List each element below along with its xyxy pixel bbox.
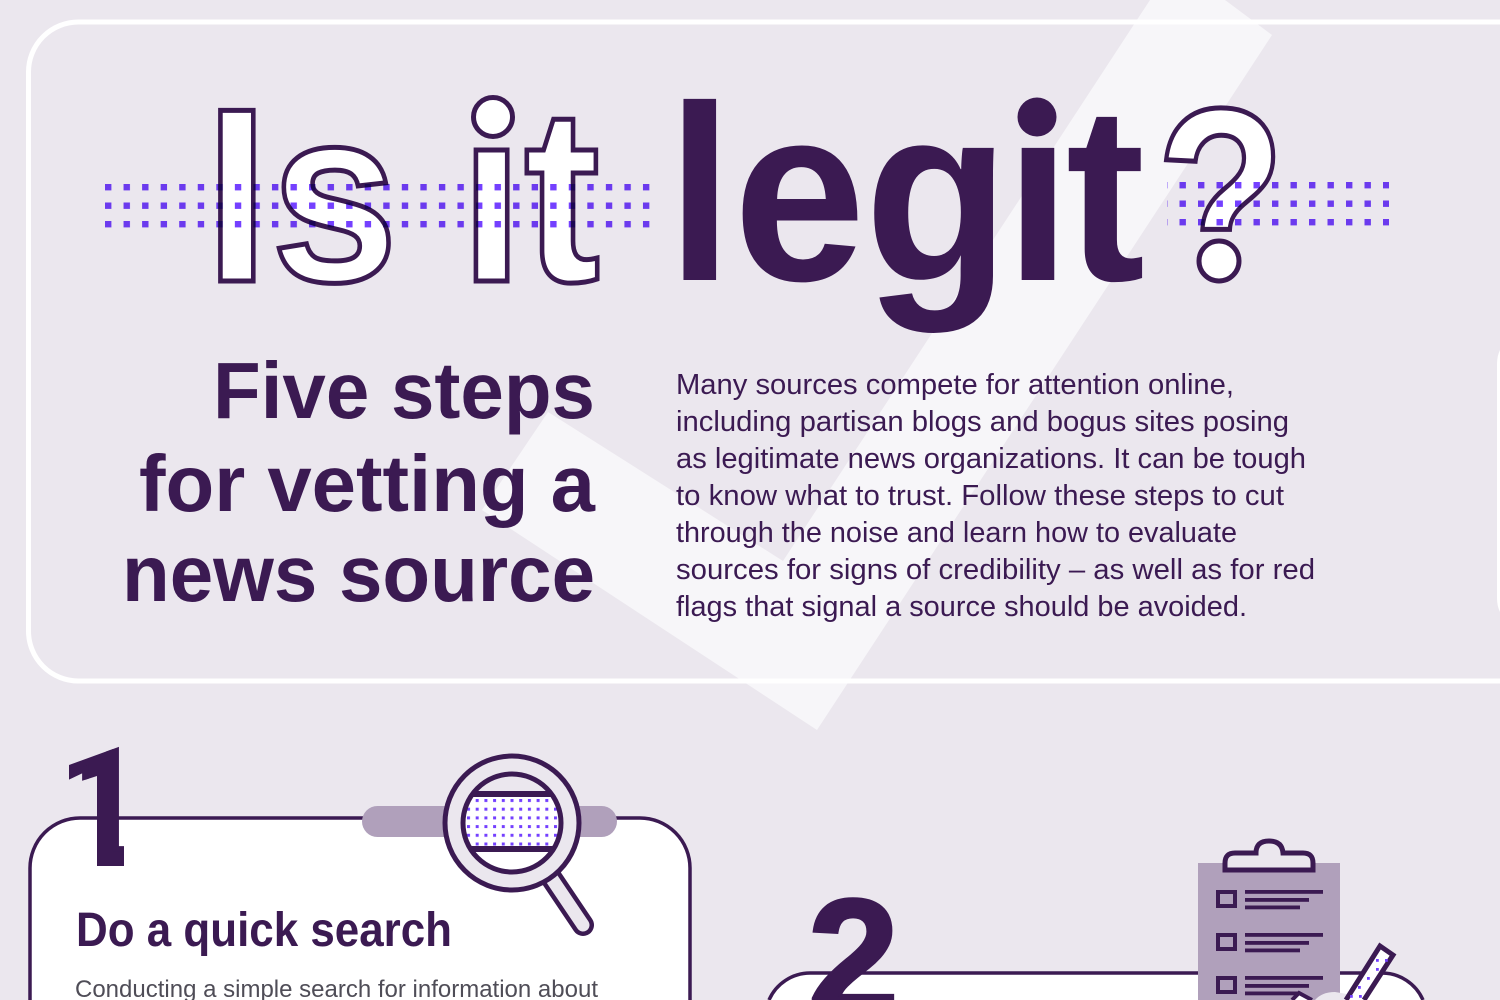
dot of solid i [1018,98,1056,136]
subtitle: Five steps [213,346,595,435]
icon: pencil [1346,946,1393,1000]
dot band left [105,184,650,228]
intro paragraph: through the noise and learn how to evaluate [676,517,1237,549]
subtitle: for vetting a [139,439,596,528]
intro paragraph: including partisan blogs and bogus sites posing [676,406,1289,438]
intro paragraph: Many sources compete for attention online, [676,369,1234,401]
title outline question mark: ? [1157,57,1285,334]
dot of question mark [1199,241,1239,281]
subtitle: news source [122,529,595,618]
subtitle [122,346,596,618]
step 1 card [28,746,692,1000]
intro paragraph [676,369,1315,623]
card 1 body [30,818,690,1000]
step number 1: 1 [34,713,157,902]
header frame [28,22,1500,681]
dot of outline i [474,98,512,136]
dot band right [1167,182,1389,226]
icon: grey dial and arrow tip [1292,992,1347,1000]
step 1 heading: Do a quick search [76,904,452,957]
icon: clipboard [1198,841,1340,1000]
step 2 card [769,841,1423,1000]
card 2 body [769,973,1423,1000]
title solid word: legit: legit [667,53,1145,333]
background check mark [482,0,1272,730]
title: Is it legit? [105,95,1389,333]
intro paragraph: as legitimate news organizations. It can be tough [676,443,1306,475]
intro paragraph: sources for signs of credibility – as well as for red [676,554,1315,586]
intro paragraph: to know what to trust. Follow these steps to cut [676,480,1284,512]
next panel edge at right [1497,350,1500,612]
intro paragraph: flags that signal a source should be avoided. [676,591,1247,623]
title outline words: Is it: Is it [205,57,600,334]
icon: magnifying glass [362,756,617,925]
